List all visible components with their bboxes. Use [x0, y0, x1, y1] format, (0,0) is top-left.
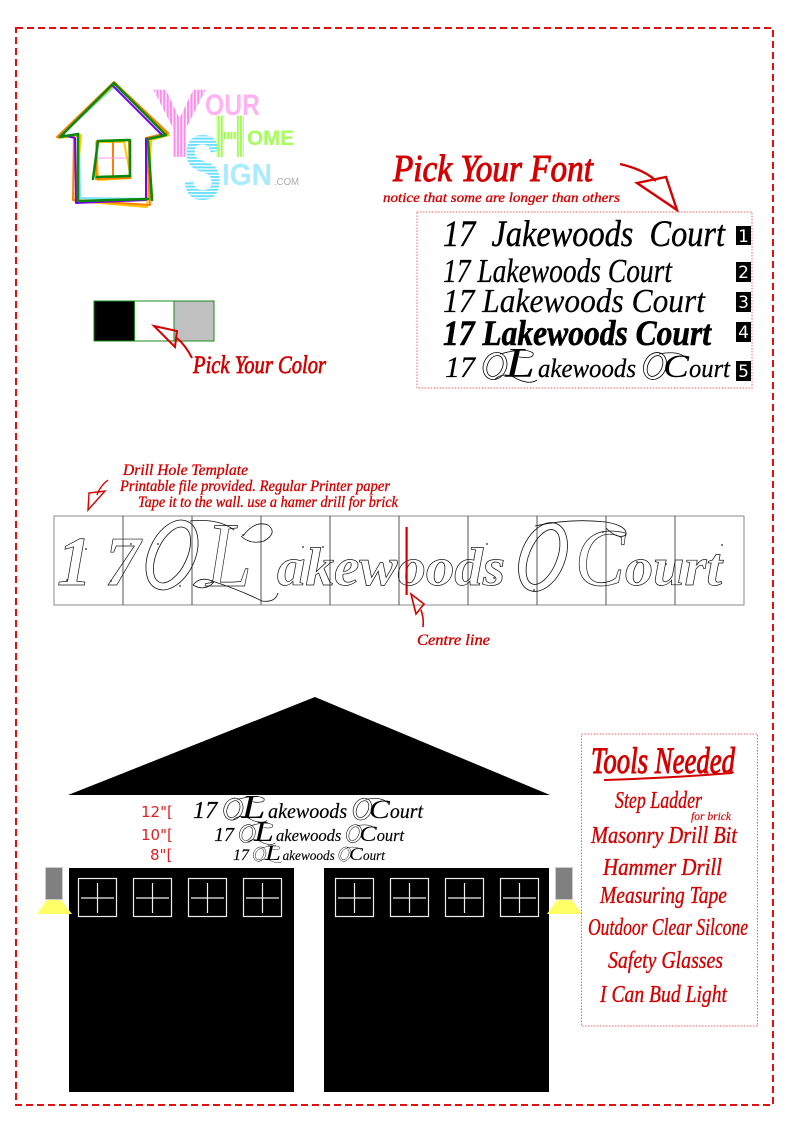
heading: Pick Your Font: Pick Your Font — [392, 148, 594, 190]
size label 8 inch: 8"[ — [150, 846, 172, 864]
size label 12 inch: 12"[ — [141, 803, 173, 821]
arrow: to font list — [620, 164, 677, 210]
arrow: to template — [88, 480, 108, 510]
font option 2: 17 Lakewoods Court — [443, 253, 673, 290]
instructions: drill hole template: Tape it to the wall. use a hamer drill for brick — [138, 494, 399, 511]
sign 10 inch: C — [359, 821, 377, 846]
sign 10 inch: akewoods — [276, 826, 342, 845]
font option 5: ourt — [689, 354, 731, 383]
logo suffix .COM: .COM — [274, 177, 299, 188]
note: font length: notice that some are longer than others — [383, 191, 621, 206]
logo word OUR: OUR — [205, 89, 260, 122]
garage illustration — [37, 697, 582, 1092]
tool: masonry drill bit: Masonry Drill Bit — [590, 823, 738, 849]
left garage door — [69, 868, 294, 1092]
font option 4: 17 Lakewoods Court — [443, 313, 712, 353]
tool: measuring tape: Measuring Tape — [599, 883, 727, 909]
drill hole template sheet — [54, 504, 744, 606]
arrow: to colour swatches — [154, 326, 192, 358]
number 1: 1 — [738, 227, 749, 247]
logo letter Y: Y — [152, 69, 207, 178]
number 2: 2 — [738, 263, 749, 283]
right garage door — [324, 868, 549, 1092]
font option 5 — [445, 341, 731, 387]
logo letter H: H — [213, 103, 247, 170]
tool: hammer drill: Hammer Drill — [602, 855, 722, 881]
tool: step ladder: Step Ladder — [615, 788, 702, 814]
number 3: 3 — [738, 293, 749, 313]
number 2 — [736, 262, 751, 283]
heading underline — [604, 773, 732, 780]
sign 10 inch: 1 7 — [214, 824, 235, 846]
drill hole dots — [66, 531, 723, 591]
number 4: 4 — [738, 323, 749, 343]
size label 10 inch: 10"[ — [141, 826, 173, 844]
note: for brick: for brick — [691, 809, 732, 823]
colour swatches — [94, 301, 214, 341]
tool: safety glasses: Safety Glasses — [608, 948, 723, 974]
panel: font choices — [417, 212, 752, 388]
sign 8 inch: 1 7 — [233, 847, 250, 864]
outlined address: ourt — [625, 537, 724, 597]
instructions: drill hole template — [119, 462, 399, 511]
outlined address: L — [204, 504, 252, 606]
font option 5: C — [663, 349, 690, 385]
sign 8 inch: L — [264, 840, 281, 865]
outlined address: 1 7 — [57, 524, 143, 601]
outlined address — [57, 504, 724, 606]
sign 12 inch: akewoods — [268, 799, 347, 823]
logo word OME: OME — [247, 127, 294, 150]
sign 12 inch: 1 7 — [193, 797, 218, 824]
font option 3: 17 Lakewoods Court — [443, 283, 706, 320]
sign 12 inch — [193, 789, 424, 826]
arrow: to centre line — [411, 594, 424, 627]
icon: sketched house — [57, 82, 169, 207]
logo word IGN: IGN — [222, 157, 272, 192]
sign 8 inch — [233, 840, 386, 865]
label: centre line: Centre line — [417, 632, 490, 649]
sign 10 inch — [214, 817, 405, 848]
left wall light — [37, 868, 72, 914]
right wall light — [547, 868, 582, 914]
sign 12 inch: ourt — [390, 799, 424, 823]
sign 10 inch: L — [253, 817, 274, 848]
sign 8 inch: ourt — [363, 848, 386, 863]
font option 5: akewoods — [538, 354, 636, 383]
font option 5: L — [504, 341, 535, 387]
centre line marker — [406, 527, 408, 595]
font option 5: 1 7 — [445, 351, 477, 384]
number 4 — [736, 322, 751, 343]
instructions: drill hole template: Printable file provided. Regular Printer paper — [119, 478, 391, 495]
sign 8 inch: akewoods — [283, 848, 335, 863]
tools heading: Tools Needed — [591, 741, 735, 782]
tool: bud light: I Can Bud Light — [599, 982, 728, 1008]
instructions: drill hole template: Drill Hole Template — [122, 462, 248, 479]
number 5 — [736, 361, 751, 382]
sign 12 inch: L — [240, 789, 266, 826]
number 1 — [736, 226, 751, 247]
font option 1: 17 Jakewoods Court — [443, 214, 727, 255]
panel: tools needed — [582, 734, 758, 1026]
outlined address: C — [575, 512, 626, 603]
outlined address: akewoods — [277, 537, 505, 597]
sign 8 inch: C — [349, 844, 363, 864]
sign 12 inch: C — [369, 794, 390, 824]
sign 10 inch: ourt — [377, 826, 405, 845]
number 5: 5 — [738, 362, 749, 382]
logo: Your Home Sign — [57, 69, 299, 219]
logo letter S: S — [183, 117, 222, 219]
roof — [68, 697, 550, 795]
number 3 — [736, 292, 751, 313]
heading: Pick Your Color: Pick Your Color — [192, 352, 326, 379]
